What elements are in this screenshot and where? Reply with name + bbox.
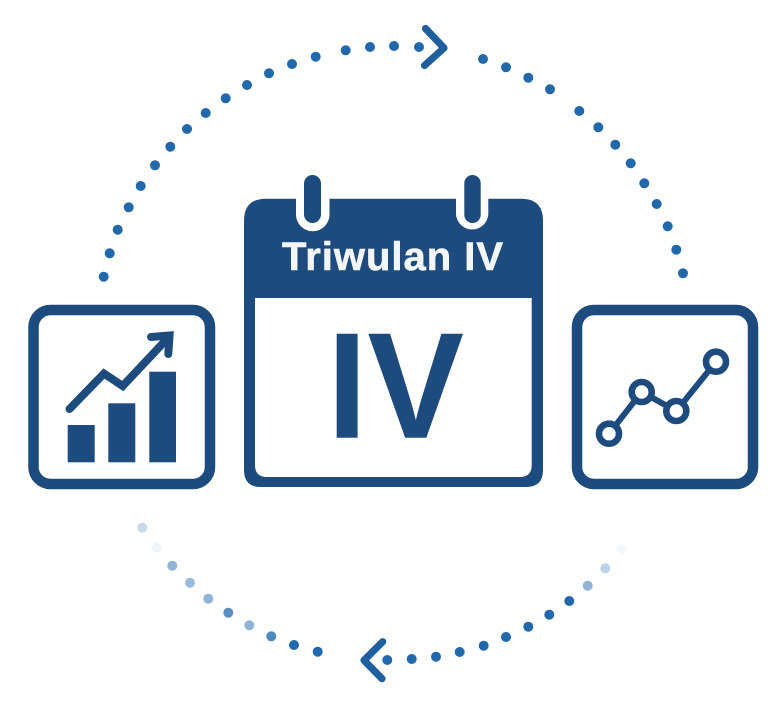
bar chart	[68, 372, 176, 462]
bottom left fading dotted arc	[137, 523, 323, 657]
calendar heading: Triwulan IV	[282, 235, 503, 279]
arrowhead: top, pointing right	[424, 28, 444, 66]
calendar page	[255, 298, 532, 477]
panel: right line chart icon	[577, 310, 753, 484]
top left dotted arc	[99, 41, 424, 282]
icon frame	[34, 310, 210, 484]
arrowhead: bottom, pointing left	[364, 642, 383, 679]
panel: left bar chart icon	[34, 310, 210, 484]
calendar body	[244, 199, 543, 487]
panel: calendar	[244, 175, 543, 487]
quarter numeral: IV	[327, 301, 464, 470]
line chart	[599, 352, 726, 444]
trend arrow	[70, 336, 170, 409]
right binder ring	[456, 175, 488, 229]
icon frame	[577, 310, 753, 484]
top right dotted arc	[478, 54, 688, 278]
left binder ring	[296, 175, 330, 231]
bottom right dotted arc	[382, 544, 627, 665]
